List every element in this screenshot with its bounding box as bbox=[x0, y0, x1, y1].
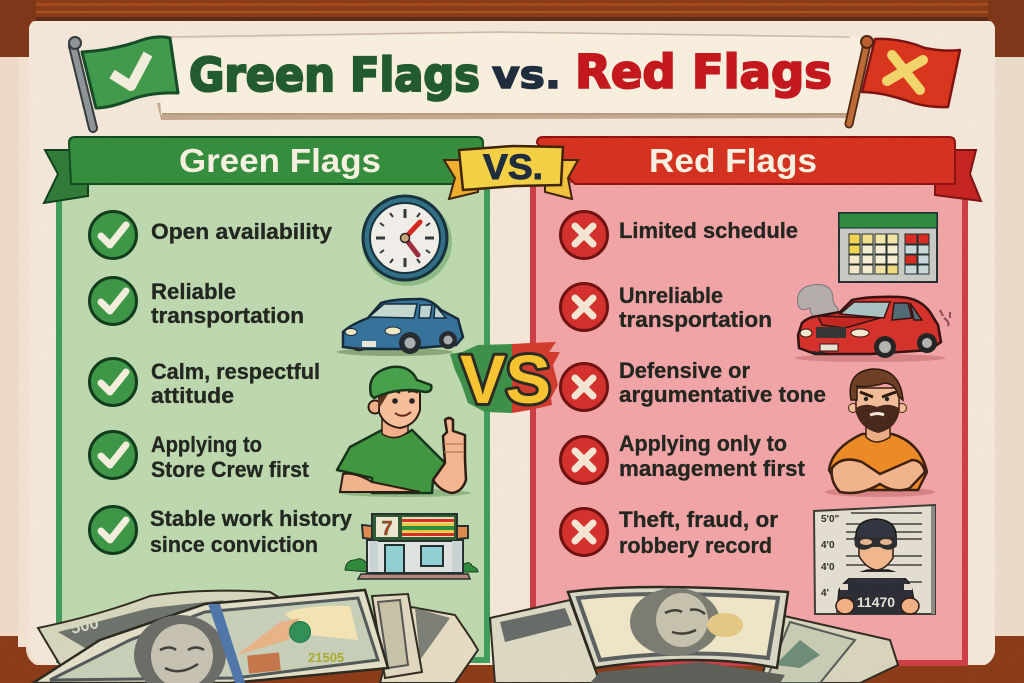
item: stable work history: Stable work history bbox=[150, 506, 353, 531]
icon: convenience store: 7 bbox=[381, 518, 393, 540]
item: open availability: Open availability bbox=[151, 219, 333, 244]
item: unreliable transportation bbox=[560, 283, 772, 332]
money pile: left: 500 bbox=[69, 613, 101, 638]
item: defensive tone: Defensive or bbox=[619, 358, 750, 383]
icon: broken red car with smoke bbox=[794, 284, 950, 362]
big VS emblem: VS bbox=[460, 341, 551, 418]
icon: convenience store bbox=[345, 514, 478, 579]
item: management first bbox=[560, 431, 806, 484]
item: defensive tone: argumentative tone bbox=[619, 382, 826, 407]
icon: mugshot thief: 5'0" bbox=[821, 514, 840, 525]
item: theft record bbox=[560, 507, 778, 558]
item: limited schedule: Limited schedule bbox=[619, 218, 798, 243]
title: vs. bbox=[492, 53, 561, 97]
item: stable work history: since conviction bbox=[150, 532, 318, 557]
vs ribbon: VS. bbox=[483, 148, 543, 187]
icon: green flag with check bbox=[69, 37, 178, 128]
item: defensive tone bbox=[560, 358, 826, 410]
item: unreliable transportation: Unreliable bbox=[619, 283, 723, 308]
icon: clock bbox=[362, 196, 452, 286]
red ribbon heading: Red Flags bbox=[649, 142, 817, 179]
item: reliable transportation bbox=[90, 278, 304, 328]
item: store crew first: Store Crew first bbox=[151, 457, 310, 482]
item: open availability bbox=[90, 212, 333, 258]
item: reliable transportation: transportation bbox=[151, 303, 304, 328]
icon: man with green cap and thumbs up bbox=[337, 367, 471, 497]
item: unreliable transportation: transportation bbox=[619, 307, 772, 332]
item: calm attitude bbox=[90, 358, 320, 408]
icon: mugshot thief: 4'0 bbox=[821, 562, 835, 573]
item: store crew first bbox=[90, 432, 310, 482]
title: Red Flags bbox=[575, 45, 832, 99]
panel: red flags bbox=[533, 137, 981, 663]
icon: blue car bbox=[337, 299, 463, 356]
icon: mugshot thief: 11470 bbox=[857, 594, 895, 610]
item: reliable transportation: Reliable bbox=[151, 279, 236, 304]
green ribbon heading bbox=[44, 137, 483, 203]
red ribbon heading bbox=[537, 137, 981, 201]
item: store crew first: Applying to bbox=[151, 432, 262, 457]
panel: green flags bbox=[44, 137, 487, 660]
icon: mugshot thief bbox=[814, 505, 935, 614]
item: calm attitude: attitude bbox=[151, 383, 234, 408]
money pile: right bbox=[490, 587, 898, 683]
vs ribbon bbox=[444, 146, 578, 199]
item: theft record: robbery record bbox=[619, 533, 772, 558]
green ribbon heading: Green Flags bbox=[179, 142, 381, 179]
item: management first: management first bbox=[619, 456, 806, 481]
item: stable work history bbox=[90, 506, 353, 557]
title banner bbox=[157, 32, 860, 120]
money pile: left: 21505 bbox=[308, 650, 344, 665]
item: calm attitude: Calm, respectful bbox=[151, 359, 320, 384]
title: Green Flags bbox=[189, 48, 480, 102]
money pile: left bbox=[33, 590, 478, 683]
title bbox=[189, 45, 832, 102]
icon: mugshot thief: 4' bbox=[821, 588, 829, 599]
icon: red flag with cross bbox=[849, 36, 960, 124]
icon: calendar bbox=[839, 213, 937, 282]
item: theft record: Theft, fraud, or bbox=[619, 507, 778, 532]
item: management first: Applying only to bbox=[619, 431, 787, 456]
item: limited schedule bbox=[560, 212, 798, 258]
icon: angry bearded man bbox=[825, 369, 935, 497]
icon: mugshot thief: 4'0 bbox=[821, 540, 835, 551]
